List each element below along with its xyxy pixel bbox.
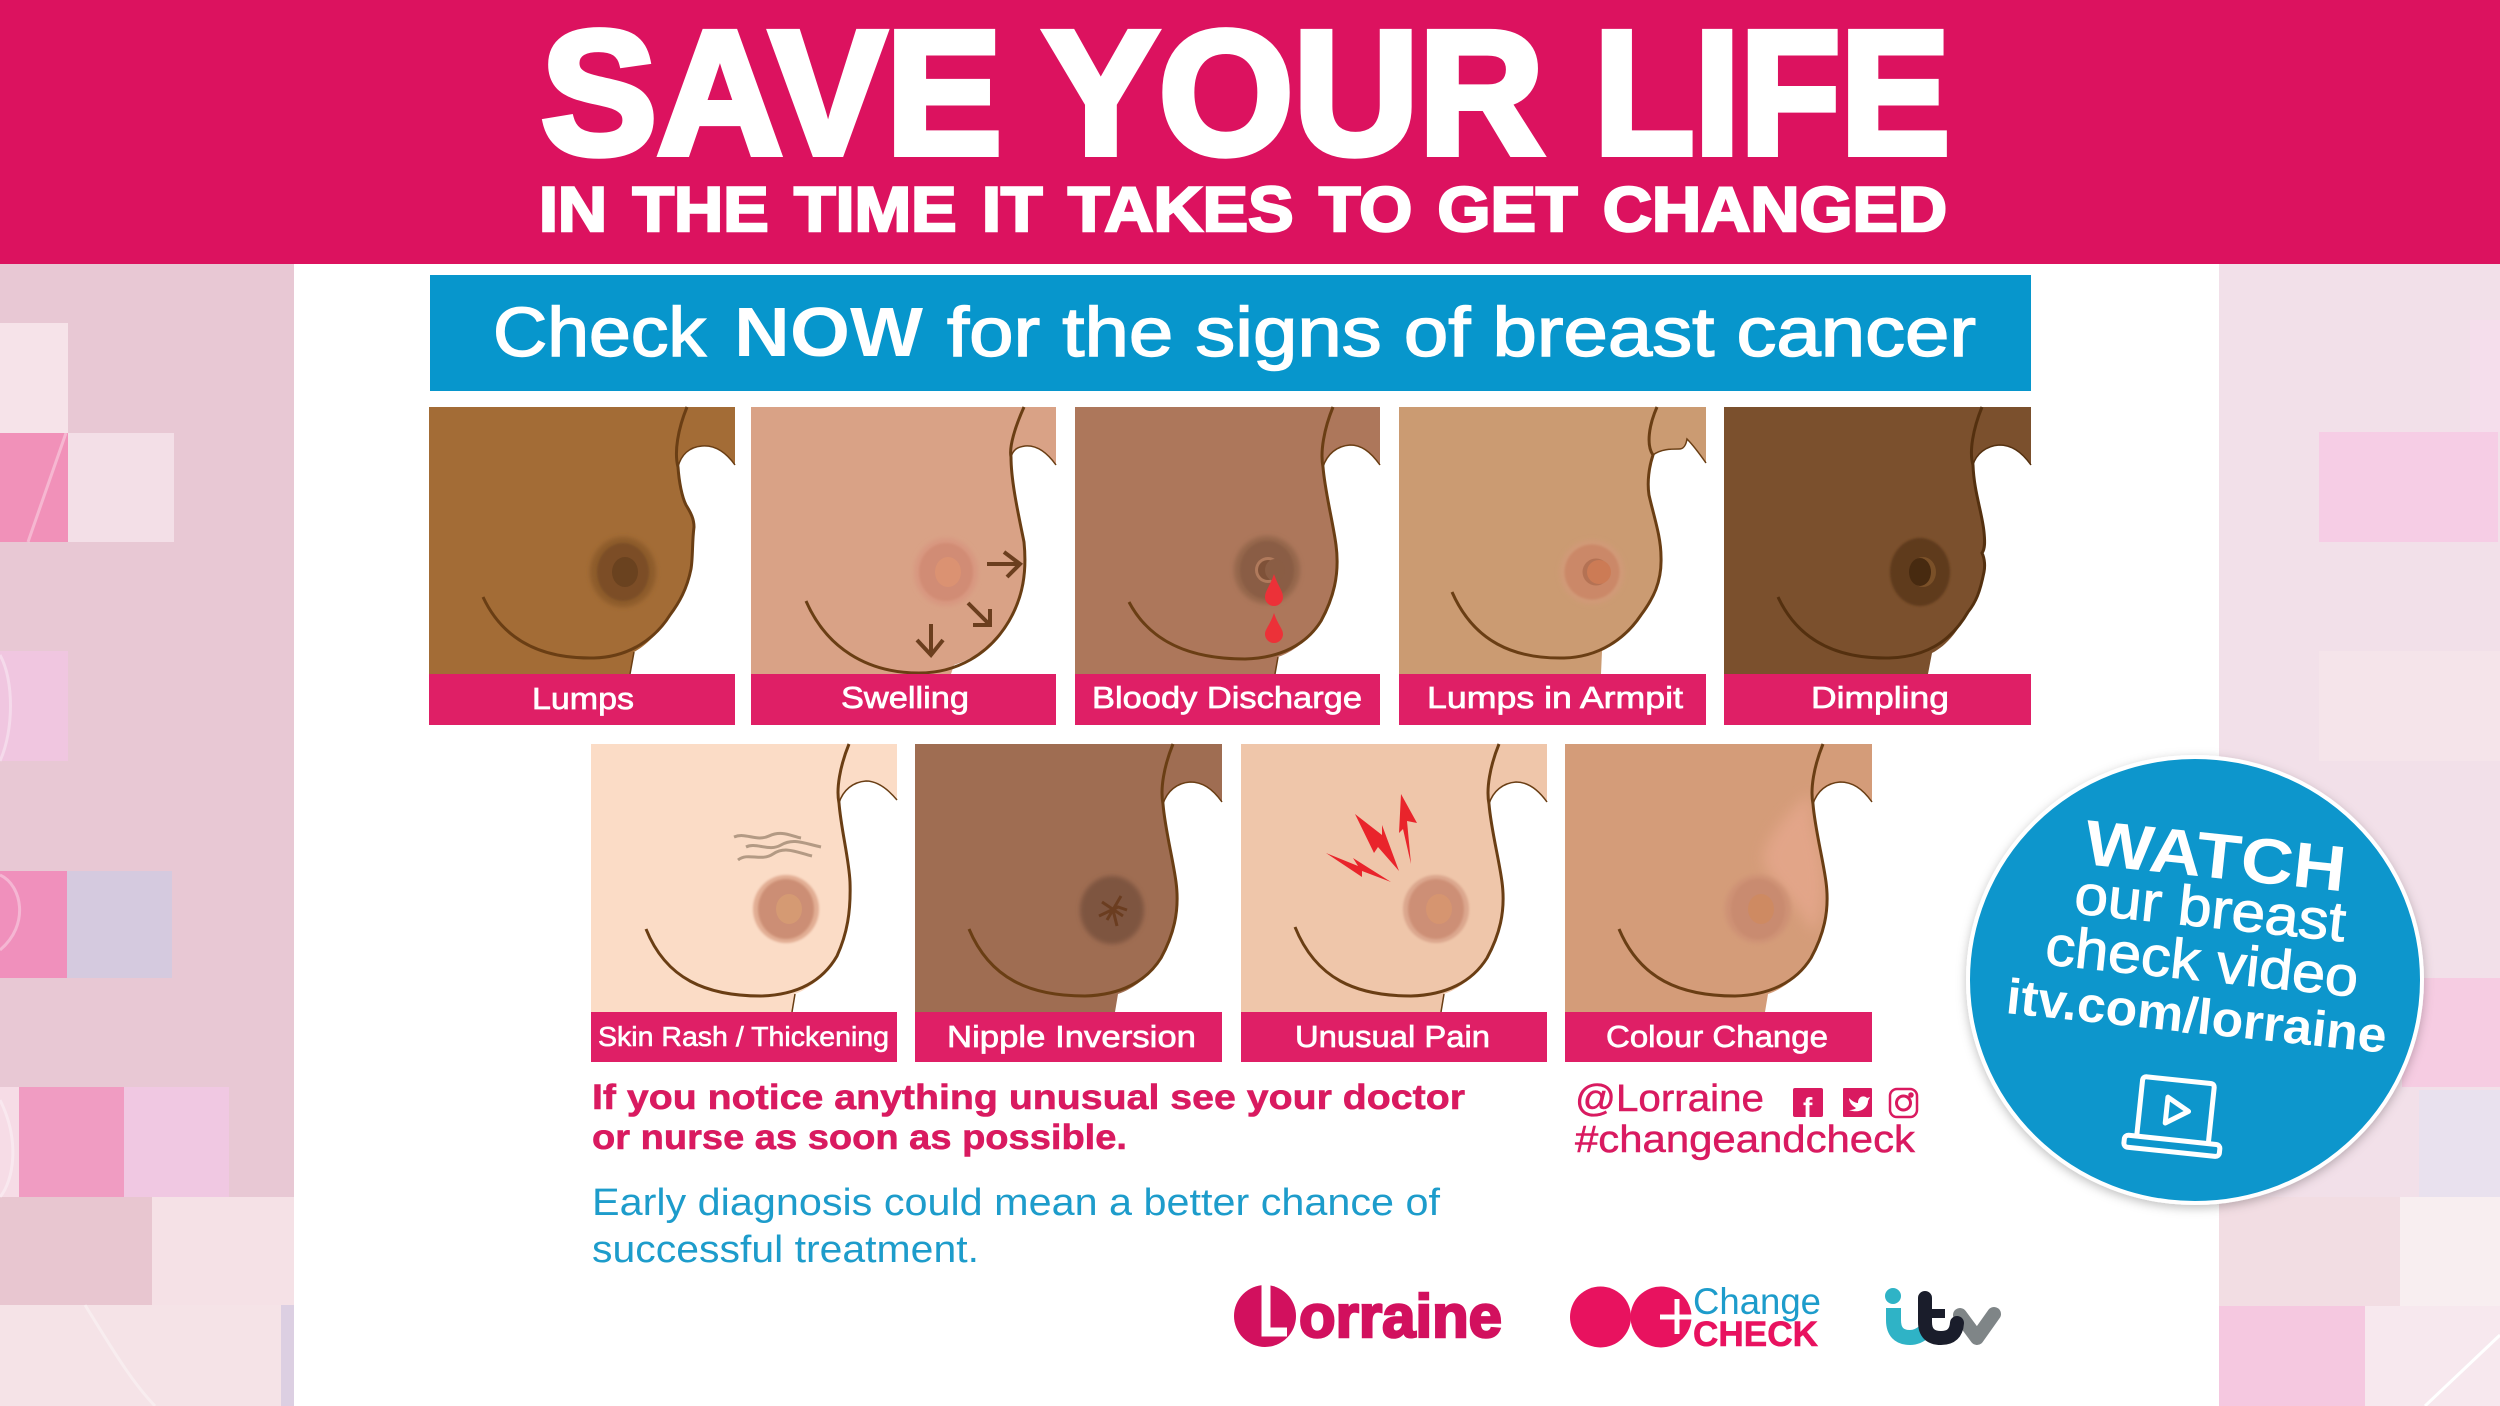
label: Swelling (751, 674, 1056, 725)
icon: facebook (1793, 1088, 1823, 1123)
label: Unusual Pain (1241, 1012, 1547, 1062)
white central panel (294, 264, 2219, 1406)
social handles: @Lorraine (1575, 1078, 1764, 1120)
label: Colour Change: Colour Change (1606, 1019, 1828, 1054)
icon: twitter (1843, 1088, 1872, 1117)
left background panel (0, 264, 294, 1406)
icon: pain bolts (1326, 794, 1417, 882)
advice text: or nurse as soon as possible. (592, 1118, 1127, 1157)
blue heading bar: Check (493, 293, 707, 371)
early diagnosis text: successful treatment. (592, 1229, 979, 1271)
social handles: #changeandcheck (1575, 1119, 1916, 1161)
label: Lumps (429, 674, 735, 725)
label: Lumps in Armpit: Lumps in Armpit (1427, 680, 1683, 715)
label: Nipple Inversion (915, 1012, 1222, 1062)
icon: blood drops (1265, 574, 1283, 643)
icon: skin rash lines (734, 833, 821, 860)
label: Bloody Discharge (1075, 674, 1380, 725)
label: Swelling: Swelling (841, 680, 969, 715)
label: Lumps: Lumps (532, 681, 634, 716)
logo: Change and Check (1570, 1281, 1821, 1354)
subtitle: IN THE TIME IT TAKES TO GET CHANGED (539, 175, 1947, 245)
card: Unusual Pain (1241, 744, 1547, 1012)
card: Swelling (751, 407, 1056, 674)
label: Unusual Pain: Unusual Pain (1295, 1019, 1490, 1054)
header banner (0, 0, 2500, 264)
label: Lumps in Armpit (1399, 674, 1706, 725)
title: YOUR (1043, 0, 1544, 192)
early diagnosis text (592, 1182, 1440, 1271)
label: Skin Rash / Thickening (591, 1012, 897, 1062)
logo: Lorraine: orraine (1299, 1283, 1502, 1350)
early diagnosis text: Early diagnosis could mean a better chance of (592, 1182, 1440, 1224)
logo: ITV (1885, 1288, 1994, 1338)
label: Dimpling (1724, 674, 2031, 725)
social handles (1575, 1078, 1916, 1161)
label: Nipple Inversion: Nipple Inversion (947, 1019, 1196, 1054)
badge: watch video: WATCH (2082, 806, 2350, 905)
colour patch (1763, 792, 1824, 934)
label: Colour Change (1565, 1012, 1872, 1062)
title (541, 0, 1950, 192)
right background panel (2219, 264, 2500, 1406)
card: Lumps (429, 407, 735, 674)
icon: swelling arrows (917, 552, 1020, 655)
label: Skin Rash / Thickening: Skin Rash / Thickening (598, 1021, 889, 1052)
icon: facebook: f (1803, 1092, 1813, 1123)
card: Bloody Discharge (1075, 407, 1380, 674)
logo: Change and Check: CHECK (1693, 1315, 1818, 1354)
card: Dimpling (1724, 407, 2031, 674)
label: Dimpling: Dimpling (1811, 680, 1949, 715)
icon: inverted nipple (1099, 896, 1127, 926)
blue heading bar: for the signs of breast cancer (947, 293, 1976, 371)
card: Skin Rash / Thickening (591, 744, 897, 1012)
badge: watch video: itv.com/lorraine (2004, 968, 2390, 1064)
card: Nipple Inversion (915, 744, 1222, 1012)
icon: laptop play (2124, 1075, 2226, 1157)
logo: Change and Check: Change (1693, 1281, 1821, 1322)
badge: watch video (1968, 757, 2422, 1203)
title: LIFE (1594, 0, 1950, 192)
advice text: If you notice anything unusual see your doctor (592, 1078, 1465, 1117)
blue heading bar (430, 275, 2031, 391)
blue heading bar: NOW (734, 293, 923, 371)
card: Colour Change (1565, 744, 1872, 1012)
card: Lumps in Armpit (1399, 407, 1706, 674)
label: Bloody Discharge: Bloody Discharge (1092, 680, 1362, 715)
badge: watch video: check video (2043, 913, 2362, 1009)
icon: instagram (1890, 1089, 1917, 1117)
advice text (592, 1078, 1465, 1157)
badge: watch video: our breast (2072, 862, 2349, 953)
title: SAVE (541, 0, 1002, 192)
